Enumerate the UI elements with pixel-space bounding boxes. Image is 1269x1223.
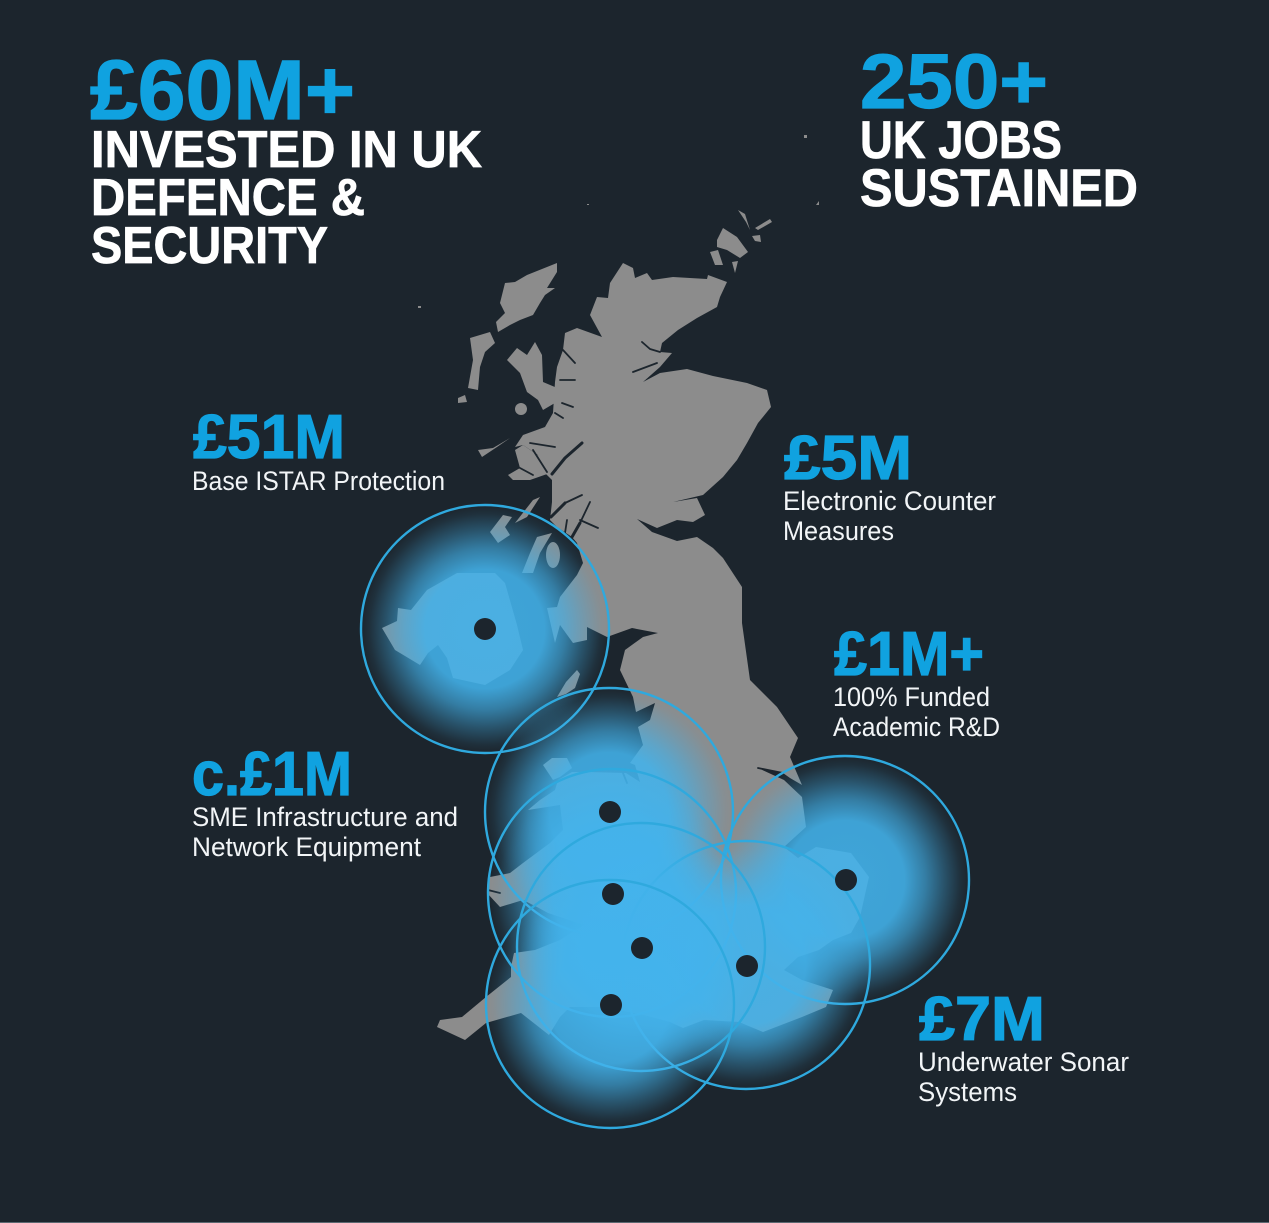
land masses [382,135,869,1040]
Shetland [738,210,772,242]
callout: electronic counter measures: Electronic Counter [783,486,996,516]
callout: underwater sonar: Systems [918,1077,1017,1107]
callout: base ISTAR protection: £51M [193,403,345,472]
Skye [507,342,562,410]
heading: total invested: £60M+ [90,43,355,137]
callout: underwater sonar: £7M [919,985,1045,1054]
Uist [468,332,495,390]
Orkney [710,228,748,273]
callout: electronic counter measures [783,424,996,546]
circle: Northern Ireland [361,505,609,753]
Rum [515,403,527,415]
heading: jobs sustained: UK JOBS [860,111,1062,170]
heading: total invested: DEFENCE & [91,169,365,227]
callout: academic R&D [833,620,1000,742]
Jura and Argyll peninsulas [515,497,540,523]
circle: Wales and Midlands [488,769,736,1017]
callout: electronic counter measures: £5M [784,424,912,493]
Isle of Man [557,670,580,697]
callout: academic R&D: £1M+ [834,620,984,689]
Lewis and Harris [496,263,557,332]
callout: base ISTAR protection: Base ISTAR Protection [192,466,445,496]
callout: academic R&D: Academic R&D [833,712,1000,742]
circle: central south [517,823,765,1071]
Kintyre [522,533,552,573]
callout: academic R&D: 100% Funded [833,682,990,712]
Northern Ireland [382,573,523,685]
callout: SME infrastructure: Network Equipment [192,832,421,862]
heading: total invested: SECURITY [91,217,328,275]
callout: SME infrastructure: c.£1M [192,740,352,809]
sea lochs and estuaries [488,342,783,893]
heading: jobs sustained: SUSTAINED [860,159,1138,218]
Barra [458,395,467,403]
heading: total invested [90,43,482,275]
remote islets [418,135,819,308]
callout: SME infrastructure: SME Infrastructure and [192,802,458,832]
callout: underwater sonar [918,985,1129,1107]
heading: jobs sustained: 250+ [860,39,1048,125]
Coll and Tiree [478,438,510,457]
location dots [474,618,857,1016]
circle: south east [622,841,870,1089]
circle: east England [721,756,969,1004]
callout: electronic counter measures: Measures [783,516,894,546]
circle: south west [486,880,734,1128]
heading: total invested: INVESTED IN UK [91,121,482,179]
heading: jobs sustained [860,39,1138,218]
circle: north England [485,688,733,936]
Great Britain mainland [437,263,869,1040]
callout: SME infrastructure [192,740,458,862]
Mull [508,445,550,480]
map of the United Kingdom [382,135,869,1040]
Arran [546,542,560,568]
Islay [490,515,512,543]
coverage circles with glow [361,505,969,1128]
callout: underwater sonar: Underwater Sonar [918,1047,1129,1077]
Anglesey [543,758,572,780]
callout: base ISTAR protection [192,403,445,496]
